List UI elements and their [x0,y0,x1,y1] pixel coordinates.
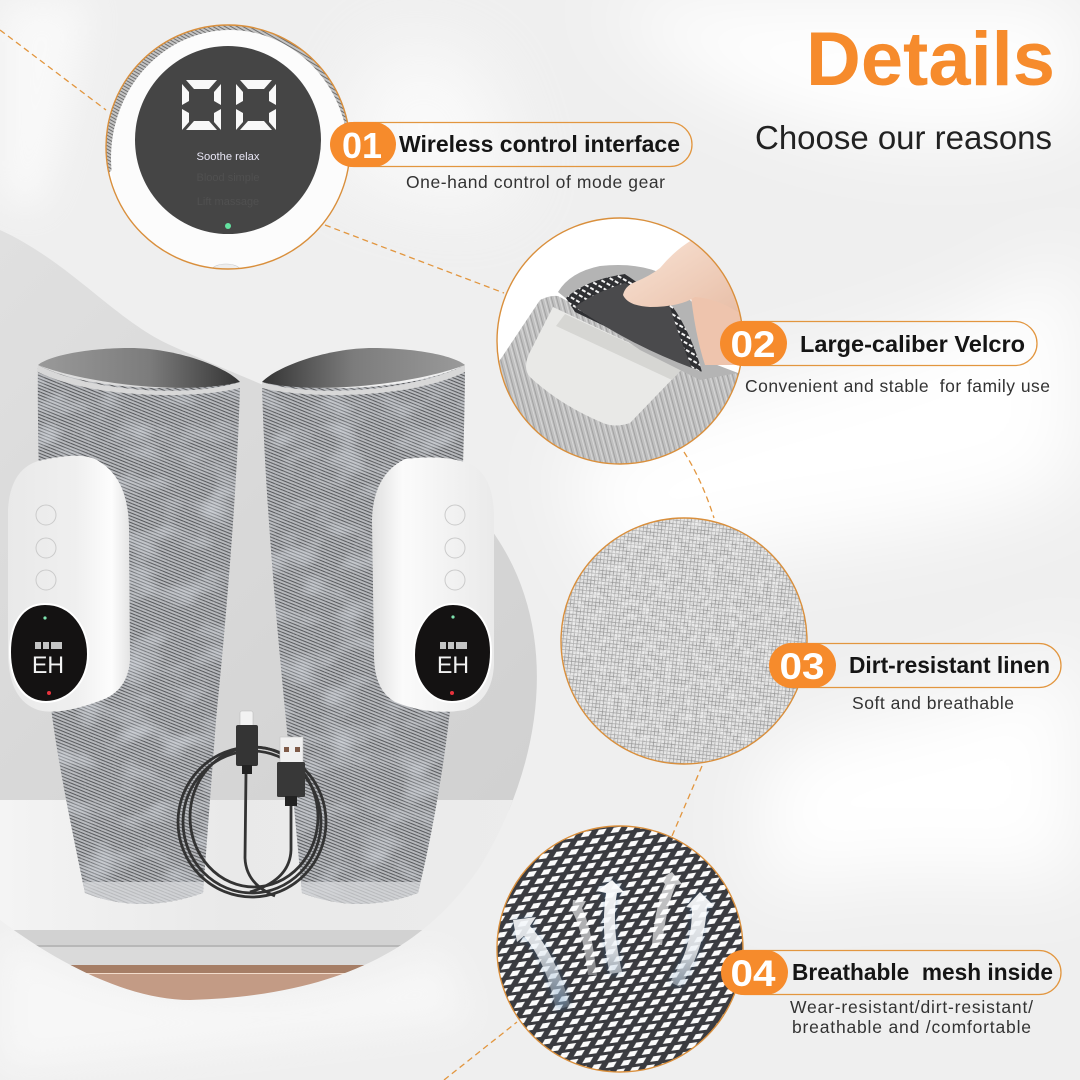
pill outline [723,950,1061,994]
seven-segment 00 readout [182,80,276,130]
orange outline [497,218,743,464]
detail circle 03: linen [560,517,810,767]
pill outline [332,122,692,166]
flap mesh edge [566,274,702,372]
pill outline [771,644,1061,688]
number badge: 03 [780,646,824,687]
description: Convenient and stable for family use [745,376,1050,396]
description: breathable and /comfortable [792,1017,1031,1037]
display [414,604,491,702]
shell [8,456,130,712]
display readout: EH [437,652,469,679]
thumb and hand [623,241,730,307]
shell [372,457,494,712]
product scene backdrop [0,220,560,1004]
right controller [372,457,494,712]
dim mode labels [197,172,259,208]
fabric band [500,296,738,464]
green status led [225,223,231,229]
buttons [445,505,465,590]
sleeve opening [262,348,465,395]
detail circle 01: control interface [105,24,350,270]
number badge: 04 [730,953,776,994]
red led [47,691,51,695]
table top [0,800,513,810]
red led [450,691,454,695]
description: Soft and breathable [852,693,1014,713]
pill outline [722,322,1037,366]
orange outline [561,518,807,764]
fabric sleeve [262,366,465,904]
flap dark lining [575,283,692,368]
lifted flap edge [558,265,738,380]
detail circle 02: velcro [490,218,745,480]
number badge [330,122,396,167]
blue halo [513,880,714,1010]
USB charging cable [178,711,326,897]
velcro hook patch [526,307,683,426]
table edge [14,930,422,965]
display icons [35,642,62,649]
outer white base [110,170,114,189]
description [790,997,1033,1037]
bottom button notch [213,264,240,268]
heading: Dirt-resistant linen [849,652,1050,678]
left controller [8,456,130,712]
green led [451,615,455,619]
dark display [135,46,321,234]
callout 02 [720,321,1050,396]
buttons [36,505,56,590]
dim mode labels: Lift massage [197,196,259,208]
callout 04 [721,950,1061,1037]
sleeve opening [38,348,240,395]
orange outline [106,25,350,269]
green led [43,616,47,620]
heading: Wireless control interface [399,131,680,157]
airflow arrows [513,872,714,1010]
display icons [440,642,467,649]
white arrows [513,872,714,1010]
callout 03 [769,643,1061,713]
heading: Large-caliber Velcro [800,331,1025,357]
description: One-hand control of mode gear [406,172,665,192]
number badge [720,321,787,366]
detail circle 04: mesh with airflow arrows [497,826,743,1072]
left leg wrap [38,348,240,904]
number badge [769,643,836,688]
orange outline [497,826,743,1072]
description: Wear-resistant/dirt-resistant/ [790,997,1033,1017]
fabric rim [106,26,347,172]
wooden floor strip [70,965,364,1000]
number badge: 01 [342,125,382,166]
right leg wrap [262,348,465,904]
white device body [111,30,348,170]
subtitle: Choose our reasons [755,119,1052,156]
type-c plug [236,711,258,774]
dashed connector lines [0,30,714,1080]
heading: Breathable mesh inside [792,959,1053,985]
coiled cable [178,747,326,897]
display [10,604,88,702]
number badge: 02 [730,324,776,365]
callout 01 [330,122,692,192]
fabric sleeve [38,365,240,904]
fingers behind flap [691,289,741,365]
usb-a plug [277,737,305,806]
title: Details [806,17,1055,102]
active mode label: Soothe relax [196,151,260,163]
number badge [721,950,788,995]
display readout: EH [32,652,64,679]
dim mode labels: Blood simple [197,172,259,184]
